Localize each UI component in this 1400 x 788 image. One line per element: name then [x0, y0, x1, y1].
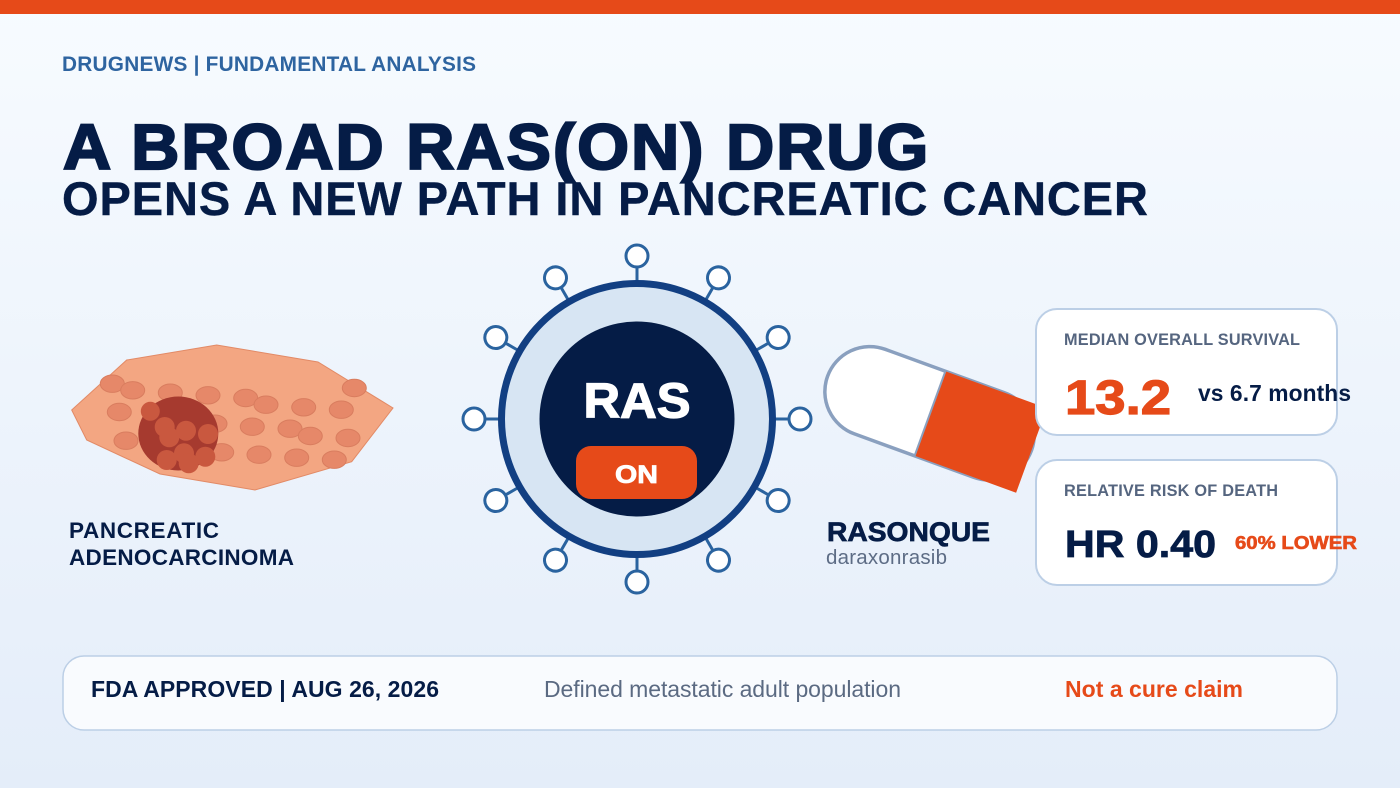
drug name: RASONQUE: [827, 517, 990, 547]
card: median overall survival: vs 6.7 months: [1198, 380, 1351, 406]
eyebrow: DRUGNEWS | FUNDAMENTAL ANALYSIS: [62, 53, 476, 76]
footer panel: [63, 656, 1337, 730]
card: relative risk of death: [1036, 460, 1357, 585]
label: pancreatic adenocarcinoma: PANCREATIC: [69, 518, 219, 543]
ON badge: [576, 446, 697, 499]
spokes: [463, 245, 811, 593]
card: median overall survival: [1036, 309, 1351, 435]
card: median overall survival: MEDIAN OVERALL SURVIVAL: [1064, 331, 1300, 349]
icon: pancreatic tumor: [72, 345, 393, 490]
card: relative risk of death: RELATIVE RISK OF DEATH: [1064, 482, 1278, 500]
icon: capsule: [812, 334, 1047, 493]
ON badge: ON: [615, 461, 658, 489]
card: relative risk of death: 60% LOWER: [1235, 533, 1357, 553]
footer panel: Not a cure claim: [1065, 676, 1243, 702]
outer ring: [502, 284, 772, 554]
title: [62, 111, 1148, 225]
inner core: [540, 322, 734, 516]
RAS label: RAS: [584, 374, 690, 428]
footer panel: Defined metastatic adult population: [544, 676, 901, 702]
card: median overall survival: 13.2: [1065, 372, 1171, 425]
card: relative risk of death: HR 0.40: [1065, 524, 1216, 566]
title: OPENS A NEW PATH IN PANCREATIC CANCER: [62, 172, 1148, 225]
icon: RAS protein: [463, 245, 811, 593]
label: pancreatic adenocarcinoma: [69, 518, 294, 570]
title: A BROAD RAS(ON) DRUG: [63, 111, 928, 183]
label: pancreatic adenocarcinoma: ADENOCARCINOMA: [69, 545, 294, 570]
drug name: [826, 517, 990, 569]
footer panel: FDA APPROVED | AUG 26, 2026: [91, 676, 439, 702]
drug name: daraxonrasib: [826, 546, 947, 569]
top accent bar: [0, 0, 1400, 14]
